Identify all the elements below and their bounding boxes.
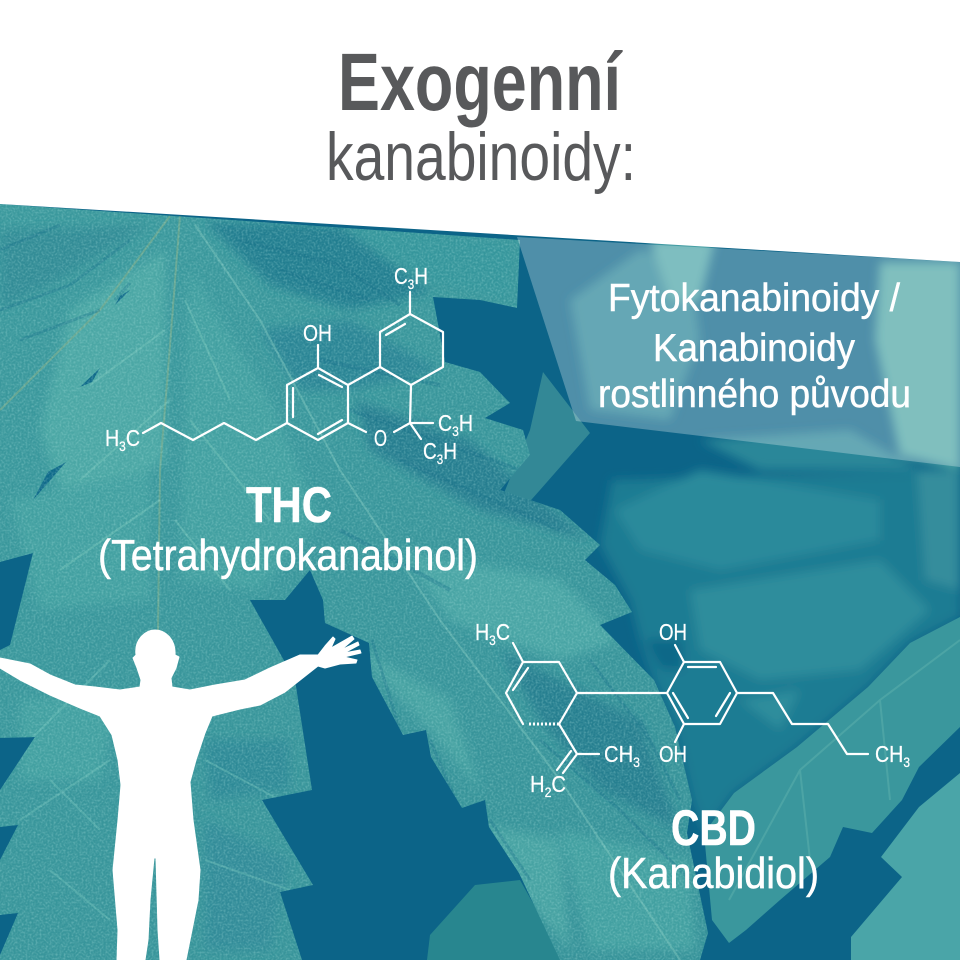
panel text: Fytokanabinoidy / (608, 277, 900, 320)
icon: human silhouette with raised arms (0, 630, 361, 960)
title: first line: Exogenní (338, 37, 623, 128)
background: cannabis leaves photo (0, 200, 960, 960)
CBD structural formula: C (551, 771, 566, 797)
THC structural formula: C (423, 438, 440, 464)
background: far bottom right leaf (851, 773, 960, 960)
THC label: THC (246, 477, 332, 533)
THC structural formula: H (459, 410, 473, 436)
CBD label (608, 800, 819, 898)
title: second line: kanabinoidy: (326, 119, 636, 195)
background: leaf tonal shading (0, 215, 695, 960)
background: narrow leaflet (497, 372, 590, 535)
title (326, 37, 636, 195)
THC structural formula: 3 (408, 276, 414, 292)
THC structural formula: C (394, 263, 411, 289)
THC label: (Tetrahydrokanabinol) (98, 531, 478, 580)
background: blurred leaves behind panel and right side (570, 240, 960, 833)
CBD structural formula: OH (659, 619, 687, 645)
background: small dark gaps (33, 290, 130, 500)
CBD structural formula: 3 (489, 632, 496, 648)
CBD structural formula: C (496, 619, 510, 645)
CBD structural formula: CH (875, 741, 908, 767)
THC structural formula: H (105, 425, 122, 451)
panel text: rostlinného původu (598, 373, 911, 416)
background: main foreground leaves (0, 204, 708, 960)
panel text (598, 277, 911, 416)
CBD structural formula: OH (659, 741, 687, 767)
CBD structural formula (475, 619, 910, 800)
THC label (98, 477, 478, 580)
THC structural formula: C (438, 410, 455, 436)
CBD structural formula: CH (604, 741, 637, 767)
CBD structural formula: 3 (903, 754, 910, 770)
panel text: Kanabinoidy (653, 327, 855, 370)
THC structural formula (105, 263, 473, 467)
THC structural formula: O (374, 425, 387, 451)
THC structural formula: 3 (437, 451, 443, 467)
background: veins and folds (0, 215, 690, 960)
CBD label: (Kanabidiol) (608, 849, 819, 898)
THC structural formula: 3 (452, 423, 459, 439)
white header band (0, 0, 960, 262)
background: leaf veins on right leaves (729, 640, 960, 900)
THC structural formula: OH (303, 320, 332, 346)
panel: plant origin label (517, 237, 960, 467)
THC structural formula: H (443, 438, 457, 464)
CBD structural formula: H (475, 619, 492, 645)
CBD structural formula: 2 (545, 784, 552, 800)
CBD label: CBD (671, 800, 756, 856)
THC structural formula: H (414, 263, 428, 289)
THC structural formula: 3 (119, 438, 126, 454)
THC structural formula: C (126, 425, 140, 451)
background: lower central leaf (427, 880, 565, 960)
CBD structural formula: 3 (633, 754, 640, 770)
CBD structural formula: H (530, 771, 547, 797)
background: bottom right leaf (704, 617, 960, 943)
